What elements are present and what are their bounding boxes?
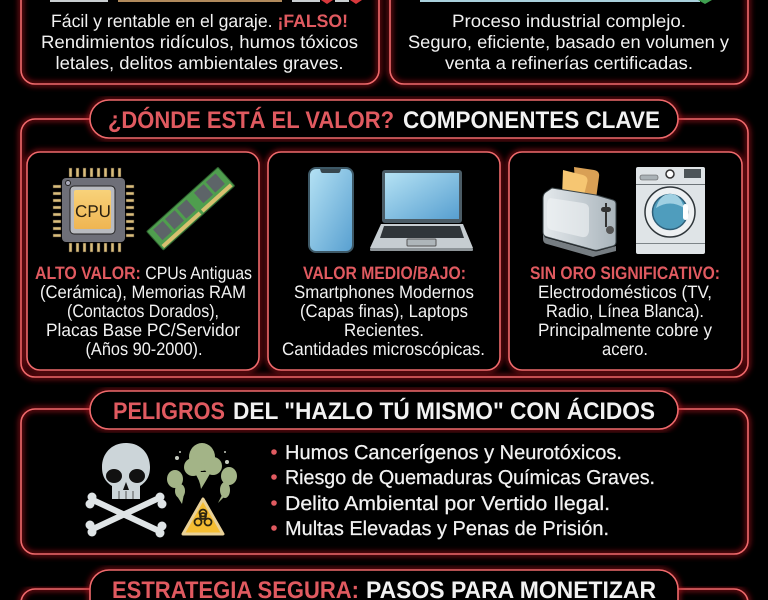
text: no gold: Electrodomésticos (TV, <box>538 282 712 302</box>
icon: CPU <box>53 168 134 252</box>
text: high value <box>35 263 252 359</box>
text: myth: Fácil y rentable en el garaje. ¡FALSO! <box>51 11 348 31</box>
icon: skull and crossbones <box>86 443 166 538</box>
card: medium value <box>268 152 500 370</box>
text: no gold: Principalmente cobre y <box>538 320 712 340</box>
list: dangers: Riesgo de Quemaduras Químicas Graves. <box>285 467 655 489</box>
panel: myth <box>21 0 379 84</box>
text: reality <box>408 11 729 73</box>
text: high value: (Cerámica), Memorias RAM <box>40 282 246 302</box>
icon: smartphone <box>309 168 353 252</box>
text: medium value: Smartphones Modernos <box>294 282 474 302</box>
panel: reality <box>390 0 748 84</box>
panel: components <box>21 100 748 377</box>
heading: dangers: DEL "HAZLO TÚ MISMO" CON ÁCIDOS <box>233 397 655 425</box>
heading: strategy <box>90 570 678 600</box>
list: dangers <box>271 442 655 540</box>
icon: toxic fumes warning <box>167 443 237 534</box>
heading: components: COMPONENTES CLAVE <box>403 107 660 134</box>
icon: CPU: CPU <box>75 202 111 221</box>
list: dangers: Humos Cancerígenos y Neurotóxicos. <box>285 442 622 464</box>
text: high value: Placas Base PC/Servidor <box>46 320 240 340</box>
text: medium value: Cantidades microscópicas. <box>282 339 485 359</box>
heading: dangers <box>90 391 678 429</box>
text: no gold: Radio, Línea Blanca). <box>546 301 704 321</box>
panel: strategy <box>21 570 748 600</box>
text: no gold: acero. <box>602 339 648 359</box>
text: no gold <box>530 263 720 359</box>
text: myth <box>41 11 358 73</box>
list: dangers: Multas Elevadas y Penas de Prisión. <box>285 518 609 540</box>
text: high value: (Años 90-2000). <box>86 339 202 359</box>
text: reality: Proceso industrial complejo. <box>452 11 686 31</box>
text: high value: ALTO VALOR: CPUs Antiguas <box>35 263 252 283</box>
card: no gold <box>509 152 742 370</box>
text: medium value <box>282 263 485 359</box>
icon: washing machine <box>636 167 705 254</box>
illustration remnant: myth <box>50 0 362 4</box>
heading: components: ¿DÓNDE ESTÁ EL VALOR? <box>108 106 394 134</box>
text: high value: (Contactos Dorados), <box>67 301 219 321</box>
text: medium value: Recientes. <box>344 320 424 340</box>
text: reality: venta a refinerías certificadas. <box>445 53 693 73</box>
text: myth: Rendimientos ridículos, humos tóxicos <box>41 32 358 52</box>
panel: dangers <box>21 391 748 554</box>
icon: toaster <box>543 167 616 257</box>
list: dangers: Delito Ambiental por Vertido Ilegal. <box>285 493 610 515</box>
text: no gold: SIN ORO SIGNIFICATIVO: <box>530 263 720 283</box>
icon: laptop <box>370 170 473 251</box>
text: myth: letales, delitos ambientales graves. <box>56 53 344 73</box>
heading: components <box>90 100 678 138</box>
text: medium value: VALOR MEDIO/BAJO: <box>303 263 466 283</box>
heading: dangers: PELIGROS <box>113 398 225 425</box>
text: reality: Seguro, eficiente, basado en volumen y <box>408 32 729 52</box>
text: medium value: (Capas finas), Laptops <box>300 301 468 321</box>
icon: RAM <box>147 167 235 250</box>
illustration remnant: reality <box>420 0 712 4</box>
card: high value <box>27 152 259 370</box>
